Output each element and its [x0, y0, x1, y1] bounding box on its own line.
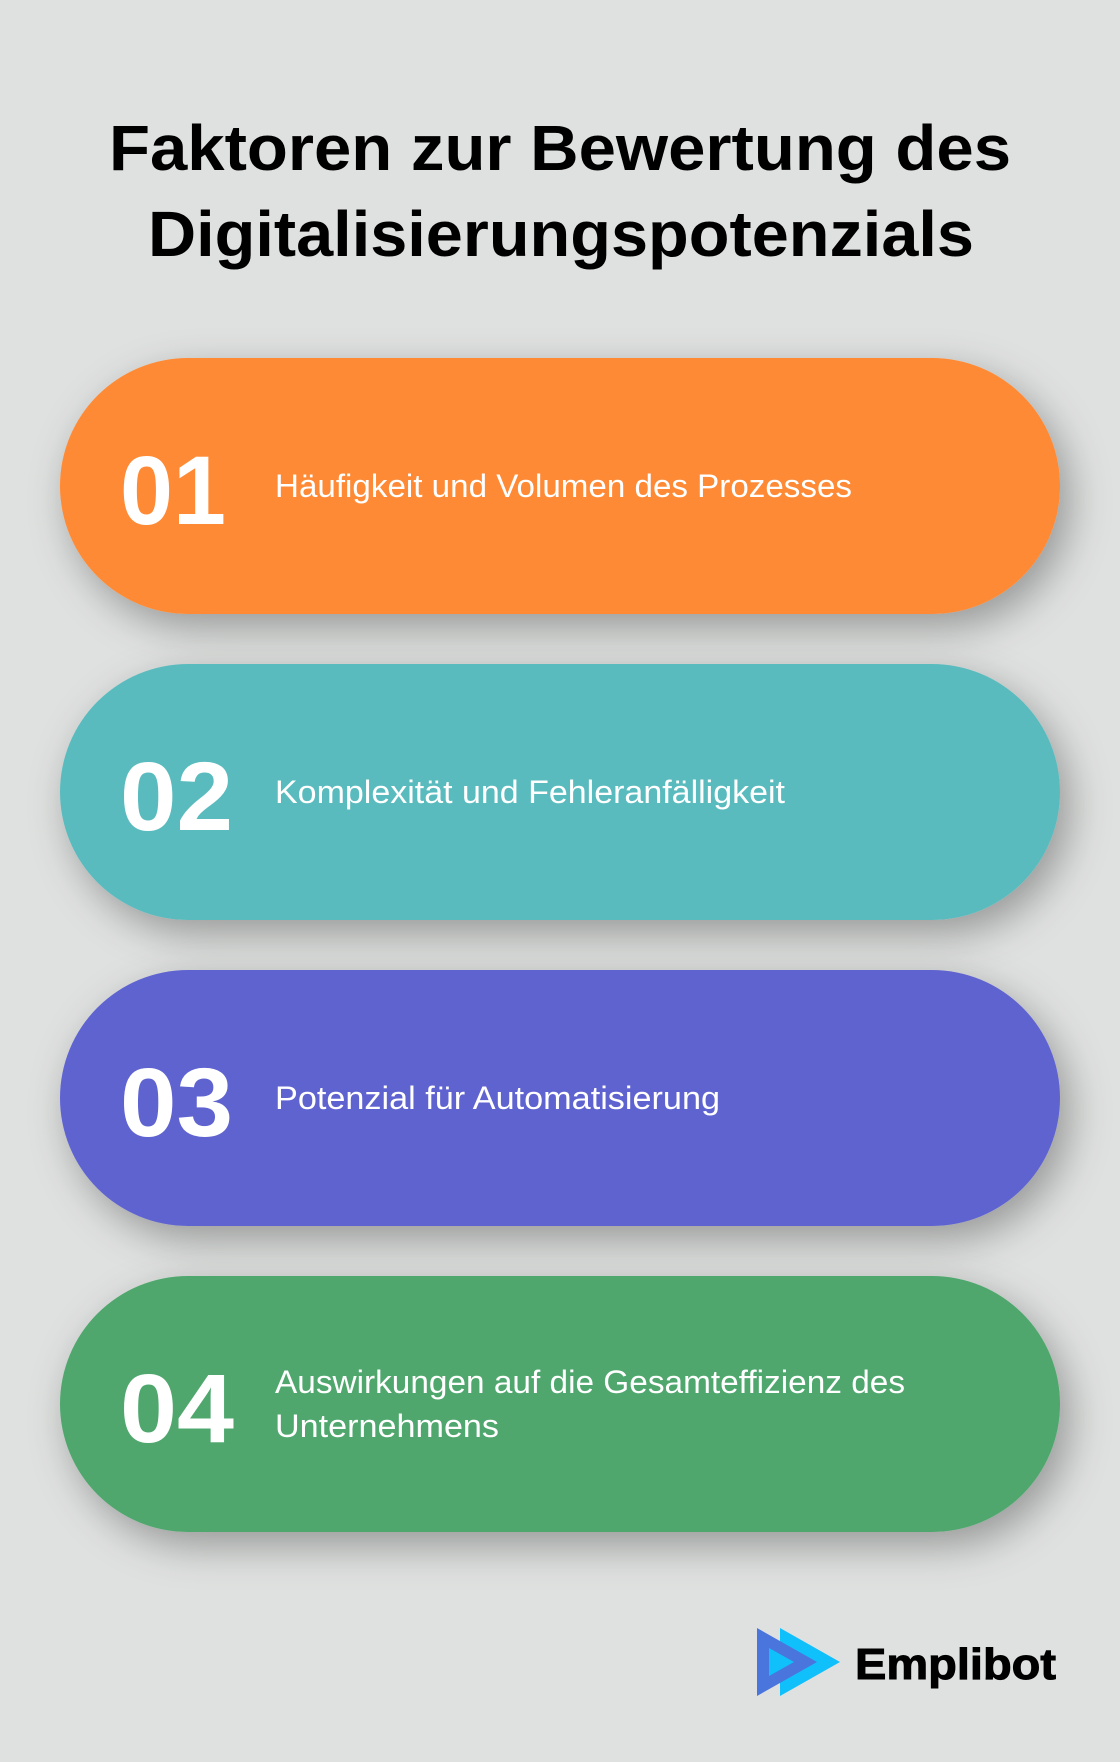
text 04: Auswirkungen auf die Gesamteffizienz des	[275, 1364, 905, 1400]
panel: factor 03	[60, 970, 1060, 1226]
panel: factor 01	[60, 358, 1060, 614]
number 01: 01	[120, 436, 226, 545]
title: Digitalisierungspotenzials	[148, 198, 974, 270]
number 02: 02	[120, 742, 233, 851]
panel: factor 04	[60, 1276, 1060, 1532]
title	[109, 112, 1011, 270]
text 03: Potenzial für Automatisierung	[275, 1080, 720, 1116]
number 03: 03	[120, 1048, 233, 1157]
text 04: Unternehmens	[275, 1408, 499, 1444]
text 02: Komplexität und Fehleranfälligkeit	[275, 774, 785, 810]
wordmark: Emplibot	[855, 1640, 1056, 1689]
text 01: Häufigkeit und Volumen des Prozesses	[275, 468, 852, 504]
logo: Emplibot	[757, 1628, 1056, 1696]
number 04: 04	[120, 1354, 234, 1463]
text 04	[275, 1364, 905, 1444]
icon: play triangles	[757, 1628, 840, 1696]
panel: factor 02	[60, 664, 1060, 920]
title: Faktoren zur Bewertung des	[109, 112, 1011, 184]
